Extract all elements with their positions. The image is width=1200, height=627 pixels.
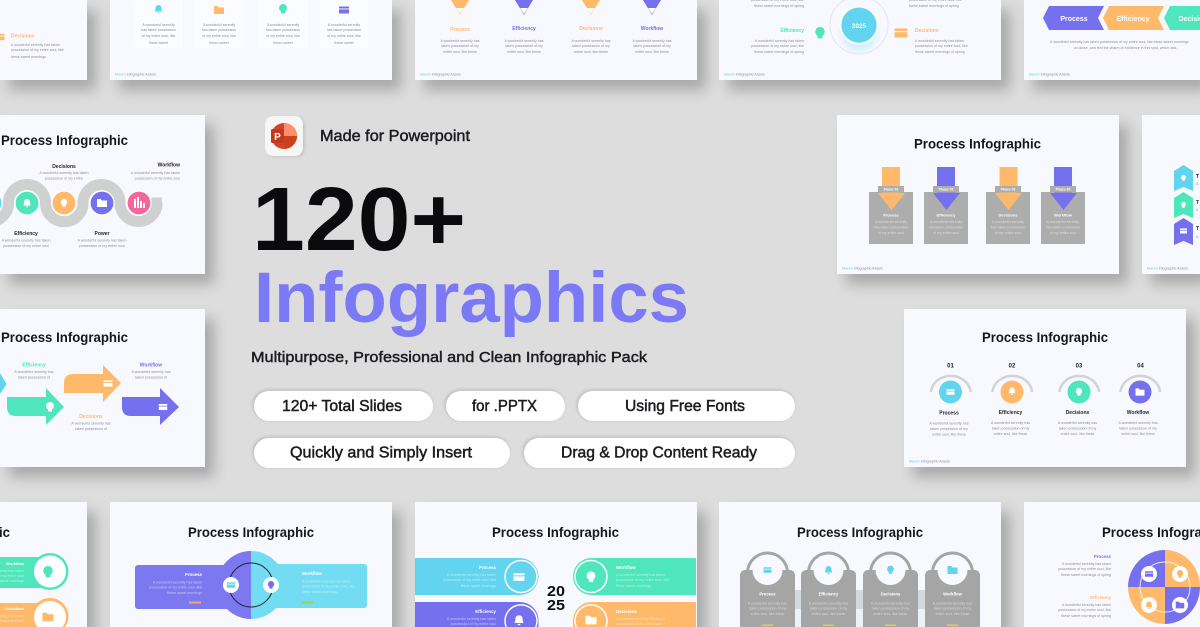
panel: split circle slide — [110, 502, 392, 627]
step 03: Decisions — [1066, 410, 1090, 416]
footer: Maxim Infographic Assets — [115, 72, 156, 76]
year: 20 — [547, 583, 565, 600]
card: box: A wonderful serenity — [328, 23, 360, 27]
card: workflow: taken possession of my — [934, 606, 971, 610]
step: decisions: entire soul, like these — [574, 50, 608, 54]
step: workflow: A wonderful serenity has — [632, 39, 672, 43]
card: bell — [134, 0, 183, 48]
text: workflow — [302, 571, 355, 604]
chevron: decisions — [1164, 6, 1200, 30]
column: workflow: Workflow — [1054, 212, 1073, 218]
step: process: A wonderful serenity has — [440, 39, 480, 43]
heading: made for powerpoint: Made for Powerpoint — [320, 128, 471, 145]
step: workflow — [632, 0, 672, 54]
text stubs: T — [1196, 226, 1199, 232]
step 04: taken possession of my — [1119, 426, 1157, 430]
step 02 — [991, 364, 1032, 436]
step 03: entire soul, like these — [1061, 432, 1094, 436]
step: efficiency — [14, 362, 54, 380]
step: decisions — [11, 34, 64, 59]
card: folder — [195, 0, 243, 48]
column: efficiency: Efficiency — [937, 212, 956, 218]
step: efficiency — [751, 27, 825, 54]
description: A wonderful serenity has taken possession of my entire soul, like these sweet mornings — [1050, 40, 1189, 44]
pill: decisions — [0, 598, 68, 627]
card: folder: these sweet — [209, 41, 229, 45]
panel: top slide with pointers — [415, 0, 697, 80]
band: decisions: A wonderful serenity has taken — [616, 617, 665, 621]
text: process — [149, 572, 203, 604]
step 03: A wonderful serenity has — [1058, 421, 1097, 425]
step 04 — [1118, 364, 1160, 436]
footer: Maxim Infographic Assets — [1029, 72, 1070, 76]
band: process: these sweet mornings — [461, 584, 496, 588]
column: decisions: Decisions — [999, 212, 1018, 218]
chart: year circle — [830, 0, 888, 54]
title: Process Infographic — [492, 524, 619, 540]
year: 25 — [547, 597, 565, 614]
step 01: 01 — [947, 364, 954, 370]
step: workflow: taken possession of — [135, 376, 167, 380]
band: process: Process — [479, 565, 497, 570]
chart: quadrant circle — [1128, 550, 1200, 624]
column: efficiency — [924, 167, 968, 244]
step: workflow: Workflow — [641, 26, 663, 32]
text: process: these sweet mornings — [167, 591, 202, 595]
text: efficiency: these sweet mornings of spring — [1061, 614, 1111, 618]
step: decisions: Decisions — [79, 414, 103, 420]
title: Process Infographic — [1, 132, 128, 148]
step: decisions: taken possession of — [75, 427, 107, 431]
chart: year circle: 2025 — [852, 23, 867, 30]
title: Process Infographic — [982, 329, 1108, 345]
band: efficiency — [415, 602, 538, 627]
band: workflow: these sweet mornings — [616, 584, 651, 588]
card: folder: of my entire soul, like — [202, 34, 236, 38]
text stubs: A — [1196, 208, 1199, 212]
column: decisions: A wonderful serenity — [992, 220, 1024, 224]
pill: quickly and simply insert — [252, 436, 510, 468]
panel: down arrows slide — [837, 115, 1119, 274]
panel: quadrant circle slide — [1024, 502, 1200, 627]
step 01 — [929, 364, 970, 436]
column: process: A wonderful serenity — [875, 220, 907, 224]
step: power: possession of my entire soul — [79, 244, 125, 248]
card: folder: A wonderful serenity — [203, 23, 235, 27]
step: efficiency: taken possession of my — [505, 44, 543, 48]
year — [547, 583, 565, 614]
step: decisions: A wonderful serenity has taken — [11, 43, 60, 47]
column: workflow: Phase 04 — [1056, 188, 1070, 192]
step: efficiency — [2, 231, 50, 248]
chart: split circle — [135, 551, 367, 619]
step: efficiency: A wonderful serenity has — [14, 370, 54, 374]
arrow: purple — [122, 388, 179, 425]
band: efficiency: A wonderful serenity has taken — [447, 617, 496, 621]
step: efficiency: possession of my entire soul — [3, 244, 49, 248]
ribbon: cyan — [1174, 165, 1193, 191]
step: efficiency: these sweet mornings of spring — [754, 50, 804, 54]
step: decisions: A wonderful serenity has — [71, 422, 111, 426]
step: efficiency: Efficiency — [780, 28, 804, 34]
column: process: has taken possession — [874, 226, 908, 230]
step 02: taken possession of my — [992, 426, 1029, 430]
column: process — [869, 167, 913, 244]
step: decisions — [894, 28, 968, 54]
icon: powerpoint — [265, 116, 305, 157]
step 02: A wonderful serenity has — [991, 421, 1030, 425]
step: decisions: these sweet mornings of spring — [915, 50, 965, 54]
chevron: efficiency: Efficiency — [1116, 16, 1150, 23]
text stubs — [1196, 174, 1199, 239]
text: efficiency: A wonderful serenity has taken — [1062, 603, 1111, 607]
arrow: cyan — [0, 373, 6, 394]
card: box — [320, 0, 368, 48]
chevron: efficiency — [1103, 6, 1164, 30]
step: efficiency: A wonderful serenity has taken — [2, 238, 50, 242]
panel: top slide with 2025 circle — [719, 0, 1001, 80]
card: workflow: entire soul, like these — [936, 612, 969, 616]
step: workflow: A wonderful serenity has — [131, 370, 171, 374]
icon: folder — [0, 34, 4, 40]
text: workflow: possession of my entire soul, like — [302, 584, 355, 588]
step: process: entire soul, like these — [443, 50, 477, 54]
step 01: A wonderful serenity has — [929, 422, 969, 426]
panel: arrows process slide — [0, 309, 205, 467]
panel: bottom-left slide — [0, 502, 87, 627]
step 01: entire soul, like these — [932, 432, 966, 436]
icon: powerpoint: P — [274, 132, 281, 143]
text: process: A wonderful serenity has taken — [153, 580, 202, 584]
step: decisions: possession of my entire — [45, 176, 83, 180]
pill: for pptx: for .PPTX — [472, 398, 538, 415]
step: power: A wonderful serenity has taken — [78, 238, 126, 242]
step: decisions: A wonderful serenity has taken — [40, 171, 88, 175]
card: bulb: these sweet — [273, 41, 293, 45]
card: efficiency: taken possession of my — [810, 606, 847, 610]
step 04: 04 — [1137, 364, 1144, 370]
step: decisions: these sweet mornings — [11, 55, 46, 59]
chevron: process — [1043, 6, 1104, 30]
step: workflow — [131, 362, 171, 380]
panel: top-right slide with chevrons — [1024, 0, 1200, 80]
pill: workflow — [0, 553, 68, 590]
card: decisions — [863, 553, 918, 627]
band: workflow: possession of my entire soul, like — [616, 578, 669, 582]
step: decisions: Decisions — [915, 28, 939, 34]
title: Process Infographic — [914, 136, 1041, 152]
title: Process Infographic — [797, 524, 923, 540]
card: folder: has taken possession — [202, 28, 236, 32]
footer: Maxim Infographic Assets — [724, 72, 765, 76]
band: workflow: Workflow — [616, 565, 636, 570]
step 04: entire soul, like these — [1121, 432, 1155, 436]
text stubs: A — [1196, 235, 1199, 239]
step 03: 03 — [1076, 364, 1083, 370]
text: upper lines: these sweet mornings of spring — [754, 4, 804, 8]
pill: workflow: Workflow — [6, 561, 25, 566]
step 03: taken possession of my — [1059, 426, 1096, 430]
band: efficiency: possession of my entire soul — [451, 622, 496, 626]
title: Process Infographic — [188, 524, 314, 540]
panel: top slide with four cards — [110, 0, 392, 80]
card: bell: has taken possession — [141, 28, 176, 32]
card: bell: of my entire soul, like — [142, 34, 175, 38]
arrow: green — [7, 388, 64, 425]
text: efficiency: possession of my entire soul, like — [1058, 608, 1111, 612]
step 01: taken possession of my — [930, 427, 968, 431]
step: efficiency: A wonderful serenity has — [504, 39, 544, 43]
step: decisions — [40, 164, 88, 180]
pill: 120+ total slides: 120+ Total Slides — [282, 398, 402, 415]
step: workflow: Workflow — [140, 362, 162, 368]
footer: Maxim Infographic Assets — [842, 266, 883, 270]
column: efficiency: Phase 02 — [939, 188, 953, 192]
card: workflow: Workflow — [943, 592, 963, 596]
card: bulb: A wonderful serenity — [267, 23, 299, 27]
panel: 2025 bands slide — [415, 502, 697, 627]
heading: infographics: Infographics — [254, 259, 689, 338]
band: process: possession of my entire soul, like — [443, 578, 496, 582]
column: decisions: has taken possession — [991, 226, 1025, 230]
column: workflow — [1041, 167, 1085, 244]
column: efficiency: of my entire soul — [933, 231, 959, 235]
step: efficiency — [504, 0, 544, 54]
step: workflow — [131, 162, 180, 180]
arrow: orange — [64, 365, 121, 402]
text: workflow: these sweet mornings — [302, 590, 337, 594]
text: efficiency — [1058, 595, 1112, 618]
step 03 — [1058, 364, 1099, 436]
step: decisions: A wonderful serenity has taken — [915, 39, 964, 43]
subtitle: Multipurpose, Professional and Clean Infographic Pack — [251, 349, 648, 366]
ribbon: purple — [1174, 218, 1193, 245]
card: process: taken possession of my — [749, 606, 786, 610]
step: efficiency: possession of my entire soul, like — [751, 44, 804, 48]
step: efficiency: Efficiency — [22, 362, 46, 368]
text stubs: T — [1196, 174, 1199, 180]
card: decisions: A wonderful serenity has — [871, 602, 910, 606]
card: box: of my entire soul, like — [327, 34, 361, 38]
card: bell: A wonderful serenity — [142, 23, 175, 27]
pill: using free fonts: Using Free Fonts — [625, 398, 745, 415]
heading: 120+: 120+ — [252, 170, 466, 270]
step 01: Process — [939, 410, 959, 416]
step: decisions — [71, 414, 111, 431]
step 02: 02 — [1009, 364, 1016, 370]
text: process: these sweet mornings of spring — [1061, 573, 1111, 577]
step: decisions: possession of my entire soul, like — [915, 44, 968, 48]
band: decisions — [573, 602, 696, 627]
card: bulb — [259, 0, 308, 48]
pill: 120+ total slides — [252, 389, 433, 421]
step: efficiency: A wonderful serenity has taken — [755, 39, 804, 43]
step: workflow: A wonderful serenity has taken — [131, 171, 180, 175]
column: workflow: A wonderful serenity — [1047, 220, 1079, 224]
text: process: possession of my entire soul, like — [149, 586, 202, 590]
text: process: A wonderful serenity has taken — [1062, 562, 1111, 566]
step 04: A wonderful serenity has — [1118, 421, 1158, 425]
text: process: Process — [1094, 554, 1112, 559]
strip — [740, 590, 980, 627]
step: decisions — [571, 0, 611, 54]
card: bulb: of my entire soul, like — [266, 34, 300, 38]
description: on alone, and feel the charm of existence in this spot, which was — [1074, 46, 1177, 50]
band: decisions: Decisions — [616, 609, 637, 614]
step: process: taken possession of my — [441, 44, 479, 48]
pill: drag and drop — [522, 436, 795, 468]
step: decisions: A wonderful serenity has — [571, 39, 611, 43]
column: efficiency: has taken possession — [929, 226, 963, 230]
footer: Maxim Infographic Assets — [420, 72, 461, 76]
text: process — [1058, 554, 1112, 577]
column: efficiency: A wonderful serenity — [930, 220, 962, 224]
column: workflow: of my entire soul — [1050, 231, 1076, 235]
chart: wave — [0, 184, 162, 222]
band: workflow — [573, 558, 696, 595]
column: decisions: Phase 03 — [1001, 188, 1015, 192]
card: process: entire soul, like these — [751, 612, 784, 616]
band: decisions: possession of my entire soul — [616, 622, 662, 626]
step: workflow: taken possession of my — [633, 44, 671, 48]
step: power — [78, 231, 126, 248]
text: process: possession of my entire soul, like — [1058, 567, 1111, 571]
column: decisions — [986, 167, 1030, 244]
card: box: these sweet — [334, 41, 354, 45]
band: process — [415, 558, 538, 595]
text: process: Process — [185, 572, 203, 577]
step: efficiency: Efficiency — [512, 26, 536, 32]
column: process: of my entire soul — [878, 231, 904, 235]
panel: semicircle steps slide — [904, 309, 1186, 467]
card: efficiency: entire soul, like these — [812, 612, 845, 616]
column: process: Phase 01 — [884, 188, 898, 192]
text: workflow: A wonderful serenity has taken — [302, 580, 351, 584]
text stubs: T — [1196, 200, 1199, 206]
pill: decisions: Decisions — [5, 606, 25, 611]
step: efficiency: taken possession of — [18, 376, 50, 380]
card: process: A wonderful serenity has — [748, 602, 787, 606]
panel: padlock cards slide — [719, 502, 1001, 627]
step: decisions: Decisions — [579, 26, 603, 32]
step 02: entire soul, like these — [994, 432, 1027, 436]
text: upper lines: these sweet mornings of spring — [909, 4, 959, 8]
step: workflow: possession of my entire soul — [135, 176, 180, 180]
step 02: Efficiency — [999, 410, 1023, 416]
band: efficiency: Efficiency — [475, 609, 497, 614]
panel: wave process slide — [0, 115, 205, 274]
panel: top-left slide — [0, 0, 87, 80]
text: efficiency: Efficiency — [1090, 595, 1112, 600]
step: decisions: possession of my entire soul, like — [11, 48, 64, 52]
pill: using free fonts — [576, 389, 795, 421]
step: process: Process — [450, 27, 470, 33]
step: efficiency: entire soul, like these — [507, 50, 541, 54]
panel: ribbon slide — [1142, 115, 1200, 274]
pill: quickly and simply insert: Quickly and Simply Insert — [290, 444, 473, 462]
chevron: process: Process — [1060, 16, 1088, 23]
card: bulb: has taken possession — [266, 28, 300, 32]
description — [1050, 40, 1189, 50]
card: efficiency — [801, 553, 856, 627]
footer: Maxim Infographic Assets — [1147, 266, 1188, 270]
step: process — [440, 0, 480, 54]
step: decisions: Decisions — [11, 34, 35, 40]
step: efficiency: Efficiency — [14, 231, 38, 237]
card: decisions: taken possession of my — [872, 606, 909, 610]
card: workflow — [925, 553, 980, 627]
column: workflow: has taken possession — [1046, 226, 1080, 230]
footer: Maxim Infographic Assets — [909, 460, 950, 464]
card: workflow: A wonderful serenity has — [933, 602, 972, 606]
pill: for pptx — [444, 389, 565, 421]
text stubs: A — [1196, 182, 1199, 186]
column: process: Process — [883, 212, 900, 218]
card: efficiency: A wonderful serenity has — [809, 602, 848, 606]
text: workflow: Workflow — [302, 571, 322, 576]
text: upper lines — [751, 0, 962, 8]
card: efficiency: Efficiency — [819, 592, 839, 596]
pill: drag and drop: Drag & Drop Content Ready — [561, 444, 757, 462]
card: process: Process — [759, 592, 776, 596]
step: decisions: Decisions — [52, 164, 76, 170]
column: decisions: of my entire soul — [995, 231, 1021, 235]
band: workflow: A wonderful serenity has taken — [616, 573, 665, 577]
step 04: Workflow — [1127, 410, 1149, 416]
card: box: has taken possession — [327, 28, 361, 32]
card: process — [740, 553, 795, 627]
step: workflow: Workflow — [158, 162, 180, 168]
card: bell: these sweet — [149, 41, 168, 45]
band: process: A wonderful serenity has taken — [447, 573, 496, 577]
step: decisions: taken possession of my — [572, 44, 610, 48]
step: power: Power — [94, 231, 110, 237]
card: decisions: Decisions — [881, 592, 901, 596]
ribbon: green — [1174, 192, 1193, 218]
step: workflow: entire soul, like these — [635, 50, 669, 54]
title: Process Infographic — [1, 329, 128, 345]
card: decisions: entire soul, like these — [874, 612, 907, 616]
